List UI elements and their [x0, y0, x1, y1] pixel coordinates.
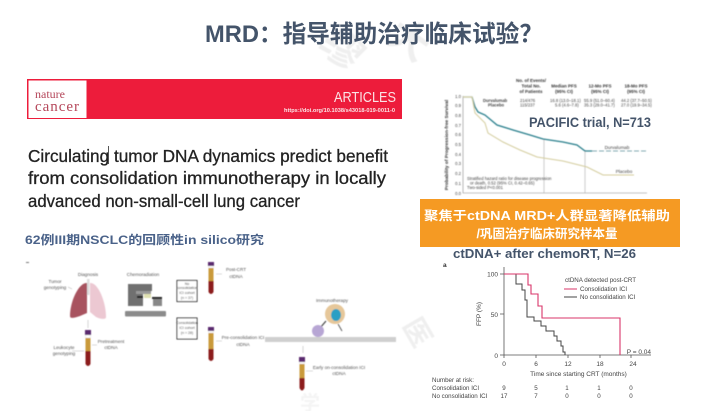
PACIFIC label: PACIFIC trial, N=713 [529, 115, 651, 130]
box: no consolidation cohort: ICI cohort [179, 291, 195, 295]
table header [516, 78, 648, 94]
journal logo: nature [35, 87, 65, 101]
risk table: No consolidation ICI [432, 393, 488, 400]
table rows: Durvalumab [483, 98, 508, 103]
diagnosis labels: ctDNA [332, 371, 347, 376]
table header: 12-Mo PFS [588, 84, 612, 88]
subheading: 62例III期NSCLC的回顾性in silico研究 [25, 232, 264, 247]
table header: Total No. [522, 84, 540, 88]
reference lines [544, 139, 585, 193]
icon: blood tube 2 [208, 262, 214, 294]
no consolidation curve [504, 274, 565, 355]
risk table: 0 [597, 393, 601, 400]
panel: FFP KM chart [432, 262, 651, 400]
diagnosis labels: Chemoradiation [127, 272, 160, 277]
legend: Consolidation ICI [580, 286, 627, 293]
y ticks: 0.0 [455, 191, 462, 196]
paper headline: advanced non-small-cell lung cancer [28, 191, 300, 211]
risk table: 7 [534, 393, 538, 400]
watermark: 缪 [312, 20, 371, 80]
box: consolidation cohort [176, 318, 198, 339]
table header: of Patients [519, 89, 543, 94]
risk table: 0 [629, 385, 633, 392]
y ticks: 1.0 [455, 94, 462, 99]
box: no consolidation cohort: No [185, 282, 189, 286]
x labels: 18 [596, 361, 604, 368]
risk table: 1 [565, 385, 569, 392]
articles label: ARTICLES [334, 89, 396, 106]
y ticks: 0.9 [455, 103, 462, 108]
panel letter: a [443, 262, 447, 269]
risk table: 0 [565, 393, 569, 400]
orange callout: /巩固治疗临床研究样本量 [477, 226, 617, 241]
box: no consolidation cohort [177, 280, 197, 302]
y labels: 0 [494, 353, 498, 360]
legend: No consolidation ICI [580, 294, 636, 301]
diagnosis labels: Immunotherapy [316, 298, 349, 303]
table rows: 5.6 (4.6–7.8) [555, 102, 579, 108]
axes [500, 267, 651, 358]
diagnosis labels: ctDNA [104, 345, 119, 350]
x labels: 24 [629, 361, 637, 368]
y ticks: 0.2 [455, 171, 462, 176]
risk table: 17 [501, 393, 508, 400]
table header: 18-Mo PFS [624, 84, 648, 88]
table header: No. of Events/ [516, 78, 547, 83]
placebo curve [463, 97, 634, 175]
watermark: 大 [380, 11, 438, 70]
table rows [483, 98, 652, 108]
doi: https://doi.org/10.1038/s43018-019-0011-0 [284, 108, 395, 114]
icon: radiation machine [125, 284, 166, 316]
diagnosis labels: ctDNA [229, 274, 244, 279]
icon: lungs [70, 279, 106, 319]
diagnosis labels: genotyping [44, 285, 67, 290]
axes [463, 96, 647, 193]
y ticks: 0.8 [455, 113, 462, 118]
risk table: 5 [534, 385, 538, 392]
stats note: or death, 0.52 (95% CI, 0.42–0.65) [470, 180, 535, 186]
risk table: 9 [502, 385, 506, 392]
x labels: 6 [534, 361, 538, 368]
table rows: 55.9 (51.0–60.4) [584, 98, 615, 103]
title: MRD：指导辅助治疗临床试验？ [205, 20, 543, 48]
box: consolidation cohort: (n = 28) [181, 331, 193, 335]
diagnosis labels: genotyping [53, 351, 76, 356]
stats note: Two-sided P<0.001 [467, 185, 504, 190]
watermark: 医 [397, 312, 438, 352]
diagnosis labels: Pre-consolidation ICI [222, 335, 264, 340]
diagnosis labels: Pretreatment [98, 339, 125, 344]
icon: blood tube 3 [208, 327, 214, 361]
box: consolidation cohort: ICI cohort [179, 326, 195, 330]
table header: (95% CI) [591, 89, 609, 94]
table rows: 16.8 (13.0–18.1) [550, 98, 581, 103]
small mark [26, 262, 29, 263]
table header: (95% CI) [555, 89, 573, 94]
table header: (95% CI) [627, 89, 645, 94]
panel: study schema diagram [26, 262, 396, 390]
p value: P = 0.04 [627, 349, 651, 356]
y axis label: Probability of Progression-free Survival [444, 100, 450, 190]
orange callout [420, 199, 680, 247]
risk table: Number at risk: [432, 377, 474, 384]
arrows [68, 274, 313, 371]
icon: immune cell [312, 304, 345, 337]
legend: ctDNA detected post-CRT [565, 277, 636, 284]
paper headline [28, 146, 388, 211]
table rows: 27.0 (19.9–34.5) [621, 102, 652, 108]
panel: PACIFIC survival chart [444, 78, 652, 196]
y ticks: 0.1 [455, 181, 462, 186]
y ticks: 0.7 [455, 123, 462, 128]
consolidation curve [504, 274, 620, 355]
risk table: 1 [597, 385, 601, 392]
risk table [432, 377, 633, 400]
diagnosis labels: Diagnosis [78, 272, 99, 277]
diagnosis labels: Tumor [48, 279, 62, 284]
table rows: 115/237 [520, 102, 535, 108]
x labels: 12 [564, 361, 572, 368]
y ticks: 0.5 [455, 142, 462, 147]
box: no consolidation cohort: (n = 37) [181, 296, 193, 300]
stats note: Stratified hazard ratio for disease progression [467, 176, 552, 181]
cursor line [108, 146, 109, 164]
box: no consolidation cohort: consolidation [177, 286, 197, 290]
paper headline: Circulating tumor DNA dynamics predict benefit [28, 146, 388, 166]
diagnosis labels: Leukocyte [54, 345, 75, 350]
y ticks: 0.6 [455, 132, 462, 137]
table rows: Placebo [488, 102, 505, 108]
diagnosis labels [44, 267, 365, 376]
table rows: 35.3 (29.0–41.7) [584, 102, 615, 108]
x labels: Time since starting CRT (months) [530, 371, 627, 378]
table rows: 214/476 [520, 98, 536, 103]
y labels: FFP (%) [476, 302, 483, 326]
diagnosis labels: ctDNA [236, 342, 251, 347]
y labels [476, 272, 498, 360]
durvalumab curve [463, 97, 592, 151]
y ticks [455, 94, 462, 196]
y labels: 50 [491, 312, 498, 319]
legend [564, 277, 636, 301]
panel: PACIFIC survival chart: Placebo [616, 169, 633, 174]
box: consolidation cohort: Consolidation [176, 321, 198, 325]
watermark [300, 11, 438, 411]
risk table: Consolidation ICI [432, 385, 479, 392]
orange callout: 聚焦于ctDNA MRD+人群显著降低辅助 [424, 208, 670, 223]
panel: journal banner [27, 79, 402, 119]
x labels [502, 361, 637, 378]
table rows: 44.2 (37.7–50.5) [621, 98, 652, 103]
y ticks: 0.3 [455, 161, 462, 166]
paper headline: from consolidation immunotherapy in locally [28, 168, 386, 188]
curve labels: Durvalumab [605, 145, 630, 150]
stats note [467, 176, 552, 190]
diagnosis labels: Early on-consolidation ICI [313, 365, 365, 370]
journal logo [35, 87, 79, 115]
immunotherapy bar [265, 337, 396, 342]
icon: blood tube 1 [85, 330, 91, 366]
icon: blood tube 4 [299, 357, 305, 390]
table header: Median PFS [551, 84, 577, 88]
diagnosis labels: Post-CRT [226, 267, 246, 272]
journal logo: cancer [35, 99, 79, 115]
ctDNA label: ctDNA+ after chemoRT, N=26 [453, 246, 636, 261]
y labels: 100 [487, 272, 498, 278]
risk table: 0 [629, 393, 633, 400]
x labels: 0 [502, 361, 506, 368]
y ticks: 0.4 [455, 152, 462, 157]
